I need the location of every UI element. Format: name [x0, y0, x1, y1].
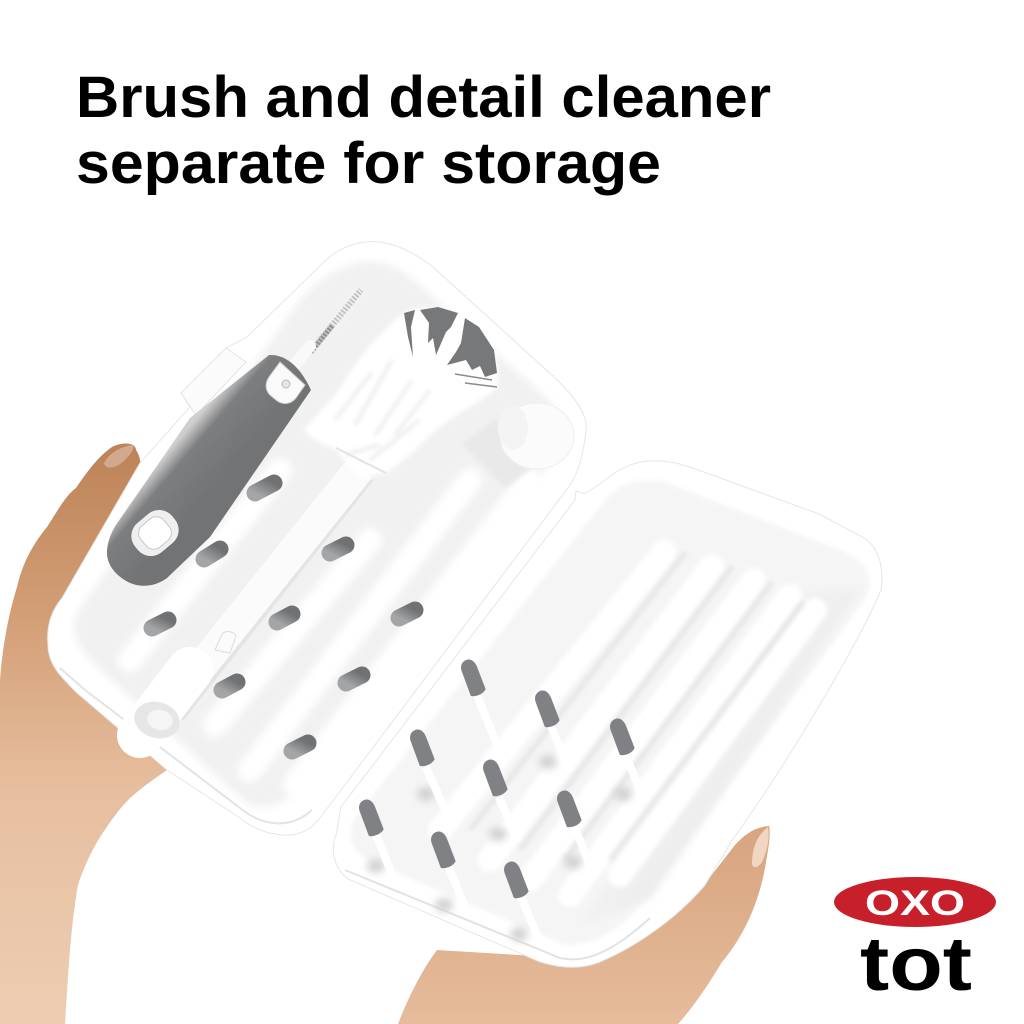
gray bristles	[404, 310, 415, 357]
title	[76, 65, 771, 196]
OXO tot logo	[834, 877, 996, 1007]
right hand	[398, 826, 770, 1024]
peg base shadows	[367, 755, 632, 941]
left case tray	[48, 242, 586, 835]
bottle brush head	[304, 307, 498, 478]
title: Brush and detail cleaner	[76, 65, 771, 130]
OXO tot logo: OXO	[865, 884, 965, 923]
brush holder post	[462, 403, 574, 488]
finger nail	[752, 827, 769, 867]
OXO oval	[834, 877, 996, 927]
right tray pegs	[357, 657, 645, 942]
lower rim line	[60, 668, 312, 823]
gray handle of detail cleaner	[107, 355, 311, 586]
tray interior	[60, 262, 562, 823]
ribs	[440, 552, 815, 895]
release button	[124, 503, 186, 563]
right case tray	[333, 461, 882, 967]
tot wordmark: tot	[860, 922, 972, 1007]
rib highlights	[130, 470, 530, 785]
latch marker	[215, 632, 236, 653]
tray interior	[345, 480, 869, 959]
bottle brush handle	[130, 468, 360, 743]
rib shadows	[470, 552, 803, 860]
left hand	[0, 444, 167, 1024]
handle clip	[266, 362, 305, 404]
left tray pegs	[152, 483, 415, 751]
detail cleaner	[292, 290, 361, 368]
thumb nail	[104, 445, 134, 468]
title: separate for storage	[76, 131, 661, 196]
inner wall shading	[643, 822, 700, 902]
lower rim line	[345, 870, 650, 959]
hinge clip	[181, 348, 246, 415]
